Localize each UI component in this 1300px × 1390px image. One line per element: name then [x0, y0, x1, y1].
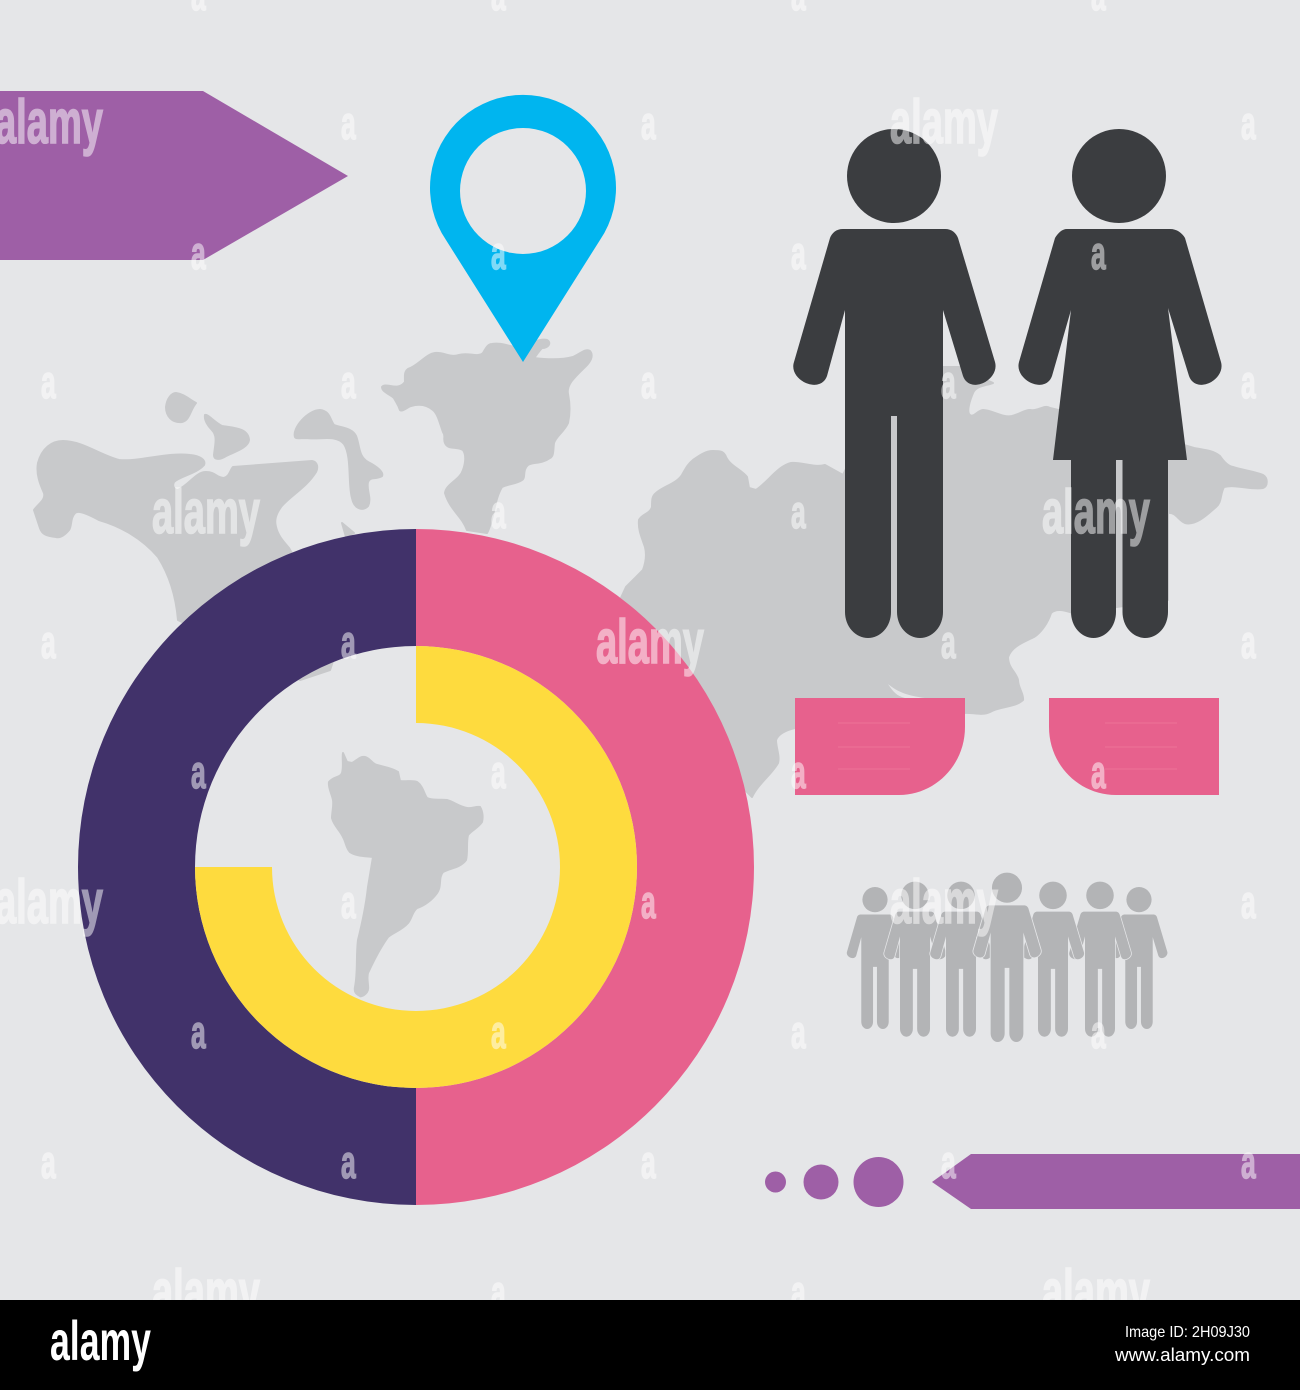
footer band — [0, 1300, 1300, 1390]
progress dots — [765, 1157, 904, 1207]
label box: man — [795, 698, 965, 795]
watermark: aa — [491, 1266, 807, 1318]
person 7 — [1111, 887, 1167, 1029]
watermark: aaaa — [191, 227, 1107, 279]
watermark: alamy — [0, 868, 103, 937]
watermark: alamy — [1042, 478, 1150, 547]
person 5 — [1022, 882, 1084, 1037]
watermark: aaaaa — [41, 1136, 1257, 1188]
footer logo: alamy — [50, 1309, 151, 1372]
arrow banner: top left — [0, 91, 348, 260]
watermark: aaaa — [191, 746, 1107, 798]
map: south america — [329, 753, 483, 996]
footer website: www.alamy.com — [1114, 1345, 1250, 1365]
donut: purple half — [78, 529, 416, 1205]
donut: yellow inner ring — [195, 646, 637, 1088]
world map — [34, 340, 1267, 996]
watermark: alamy — [890, 868, 998, 937]
map: north america — [34, 441, 340, 680]
map: eurasia and africa — [620, 367, 1267, 797]
person 3 — [930, 882, 992, 1037]
watermark: aaaaa — [41, 356, 1257, 408]
map: island three — [295, 410, 382, 509]
donut: pink half — [416, 529, 754, 1205]
icon: man — [793, 129, 996, 638]
icon: woman — [1018, 129, 1222, 638]
map: island two — [205, 415, 249, 459]
icon: location pin — [430, 95, 616, 362]
person 6 — [1069, 882, 1131, 1037]
watermark: alamy — [1042, 1258, 1150, 1327]
footer image id: Image ID: 2H09J30 — [1125, 1324, 1250, 1341]
watermark: aaa — [341, 97, 1257, 149]
person 2 — [884, 882, 946, 1037]
person 1 — [847, 887, 903, 1029]
map: small cape — [342, 523, 354, 537]
donut chart — [78, 529, 754, 1205]
watermark: aaaa — [41, 616, 1257, 668]
map: inland sea sliver — [888, 684, 925, 698]
watermark: alamy — [152, 1258, 260, 1327]
map: greenland — [382, 340, 592, 533]
watermark: aaa — [341, 876, 1257, 928]
label box: woman — [1049, 698, 1219, 795]
watermark: aa — [491, 486, 807, 538]
person 4 — [973, 873, 1041, 1042]
watermark: alamy — [890, 88, 998, 157]
arrow banner: bottom right — [932, 1154, 1300, 1209]
watermark: alamy — [0, 88, 103, 157]
watermark: alamy — [596, 608, 704, 677]
watermark: alamy — [152, 478, 260, 547]
icon: crowd of people — [847, 873, 1167, 1042]
map: island one — [166, 393, 196, 422]
watermark: aaaa — [191, 1006, 1107, 1058]
